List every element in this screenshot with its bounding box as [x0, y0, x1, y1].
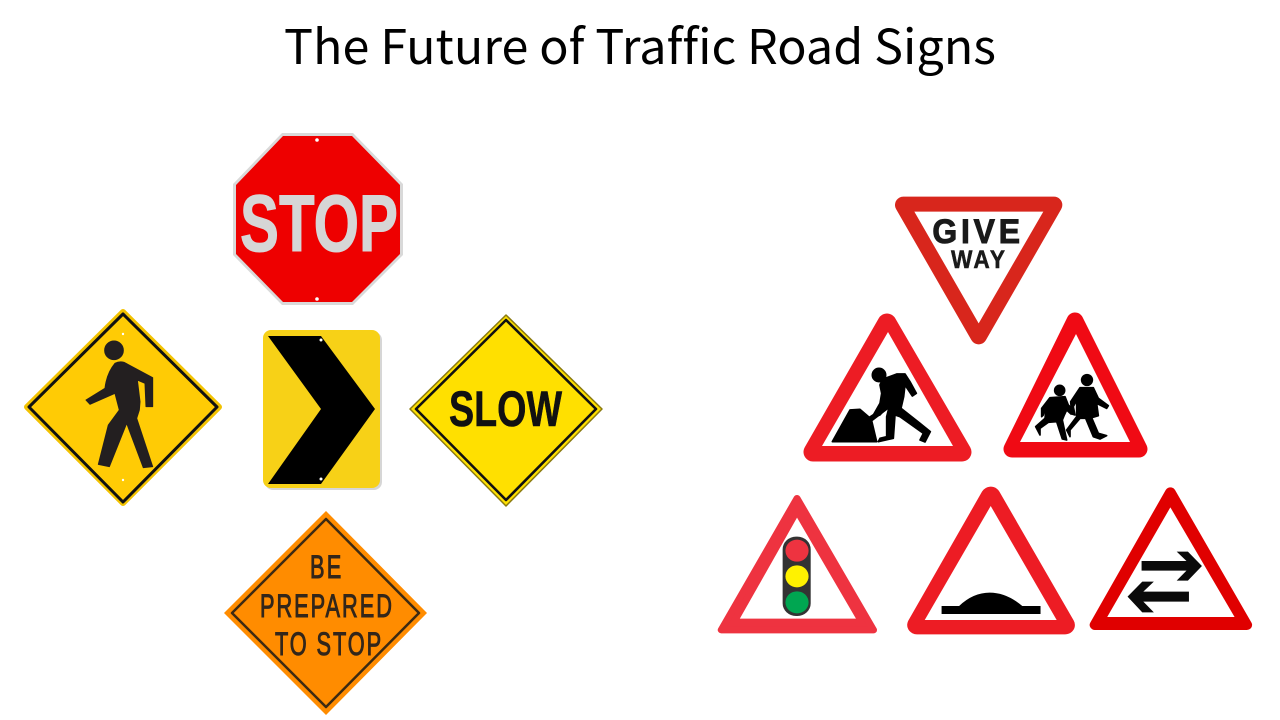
traffic light: [783, 537, 811, 616]
sign: road works triangle: [813, 323, 962, 452]
sign: chevron: [263, 330, 382, 490]
opposing arrows: [1128, 552, 1202, 612]
sign: two-way traffic triangle: [1095, 492, 1247, 625]
sign: give way triangle: WAY: [951, 247, 1005, 274]
sign: slow diamond: SLOW: [449, 381, 563, 437]
sign: stop octagon: STOP: [240, 179, 398, 269]
sign: slow diamond: [410, 315, 602, 506]
hump: [942, 593, 1041, 614]
pedestrian figure: [86, 341, 153, 468]
sign: be prepared to stop diamond: [224, 511, 427, 715]
two children figures: [1036, 375, 1108, 440]
sign: road hump triangle: [917, 496, 1065, 625]
worker and pile of earth: [832, 368, 930, 442]
sign: traffic signals triangle: [721, 498, 874, 630]
sign: give way triangle: [903, 205, 1054, 336]
sign: stop octagon: [233, 133, 403, 305]
sign: children crossing triangle: [1012, 321, 1139, 449]
sign: be prepared to stop diamond: BE: [310, 549, 341, 585]
sign: be prepared to stop diamond: PREPARED: [260, 588, 392, 624]
sign: give way triangle: GIVE: [932, 213, 1020, 251]
sign: pedestrian crossing diamond: [27, 312, 219, 503]
sign: be prepared to stop diamond: TO STOP: [275, 626, 381, 662]
title: The Future of Traffic Road Signs: [284, 8, 996, 78]
